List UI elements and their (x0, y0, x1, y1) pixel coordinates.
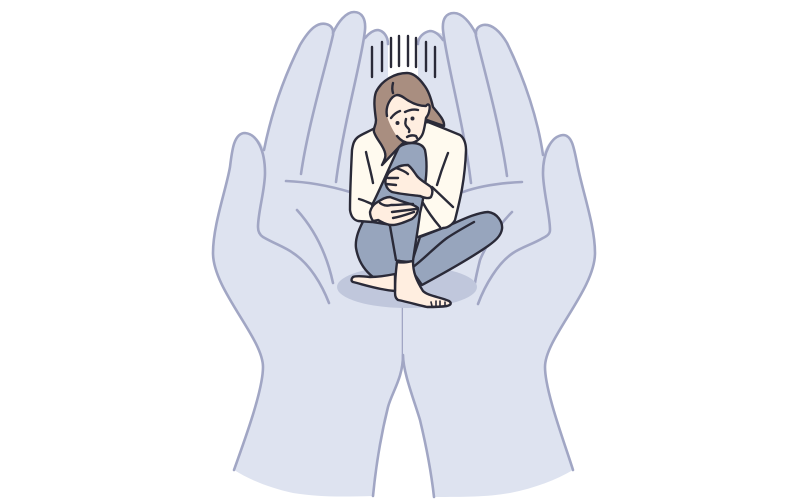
upper hand on knee (385, 165, 432, 198)
woman sitting and hugging her knee (350, 73, 502, 307)
right leg bent across (410, 212, 502, 285)
lower hand on knee (370, 197, 418, 225)
hair (374, 73, 444, 165)
left hand (213, 12, 404, 497)
right hand (403, 13, 595, 497)
left leg on ground (356, 218, 400, 277)
face (386, 95, 430, 143)
sweater fold lines (359, 152, 453, 227)
facial features (391, 110, 418, 138)
raised leg (372, 143, 426, 262)
motion lines above head (372, 36, 435, 77)
ground shadow (337, 266, 477, 308)
lower hand finger lines (380, 203, 416, 218)
upper hand finger lines (386, 168, 408, 185)
sweater body (350, 122, 466, 237)
right leg fold lines (413, 222, 474, 267)
hair strand (391, 83, 394, 93)
toes (431, 301, 445, 306)
left foot (352, 274, 395, 291)
right foot (395, 261, 451, 307)
